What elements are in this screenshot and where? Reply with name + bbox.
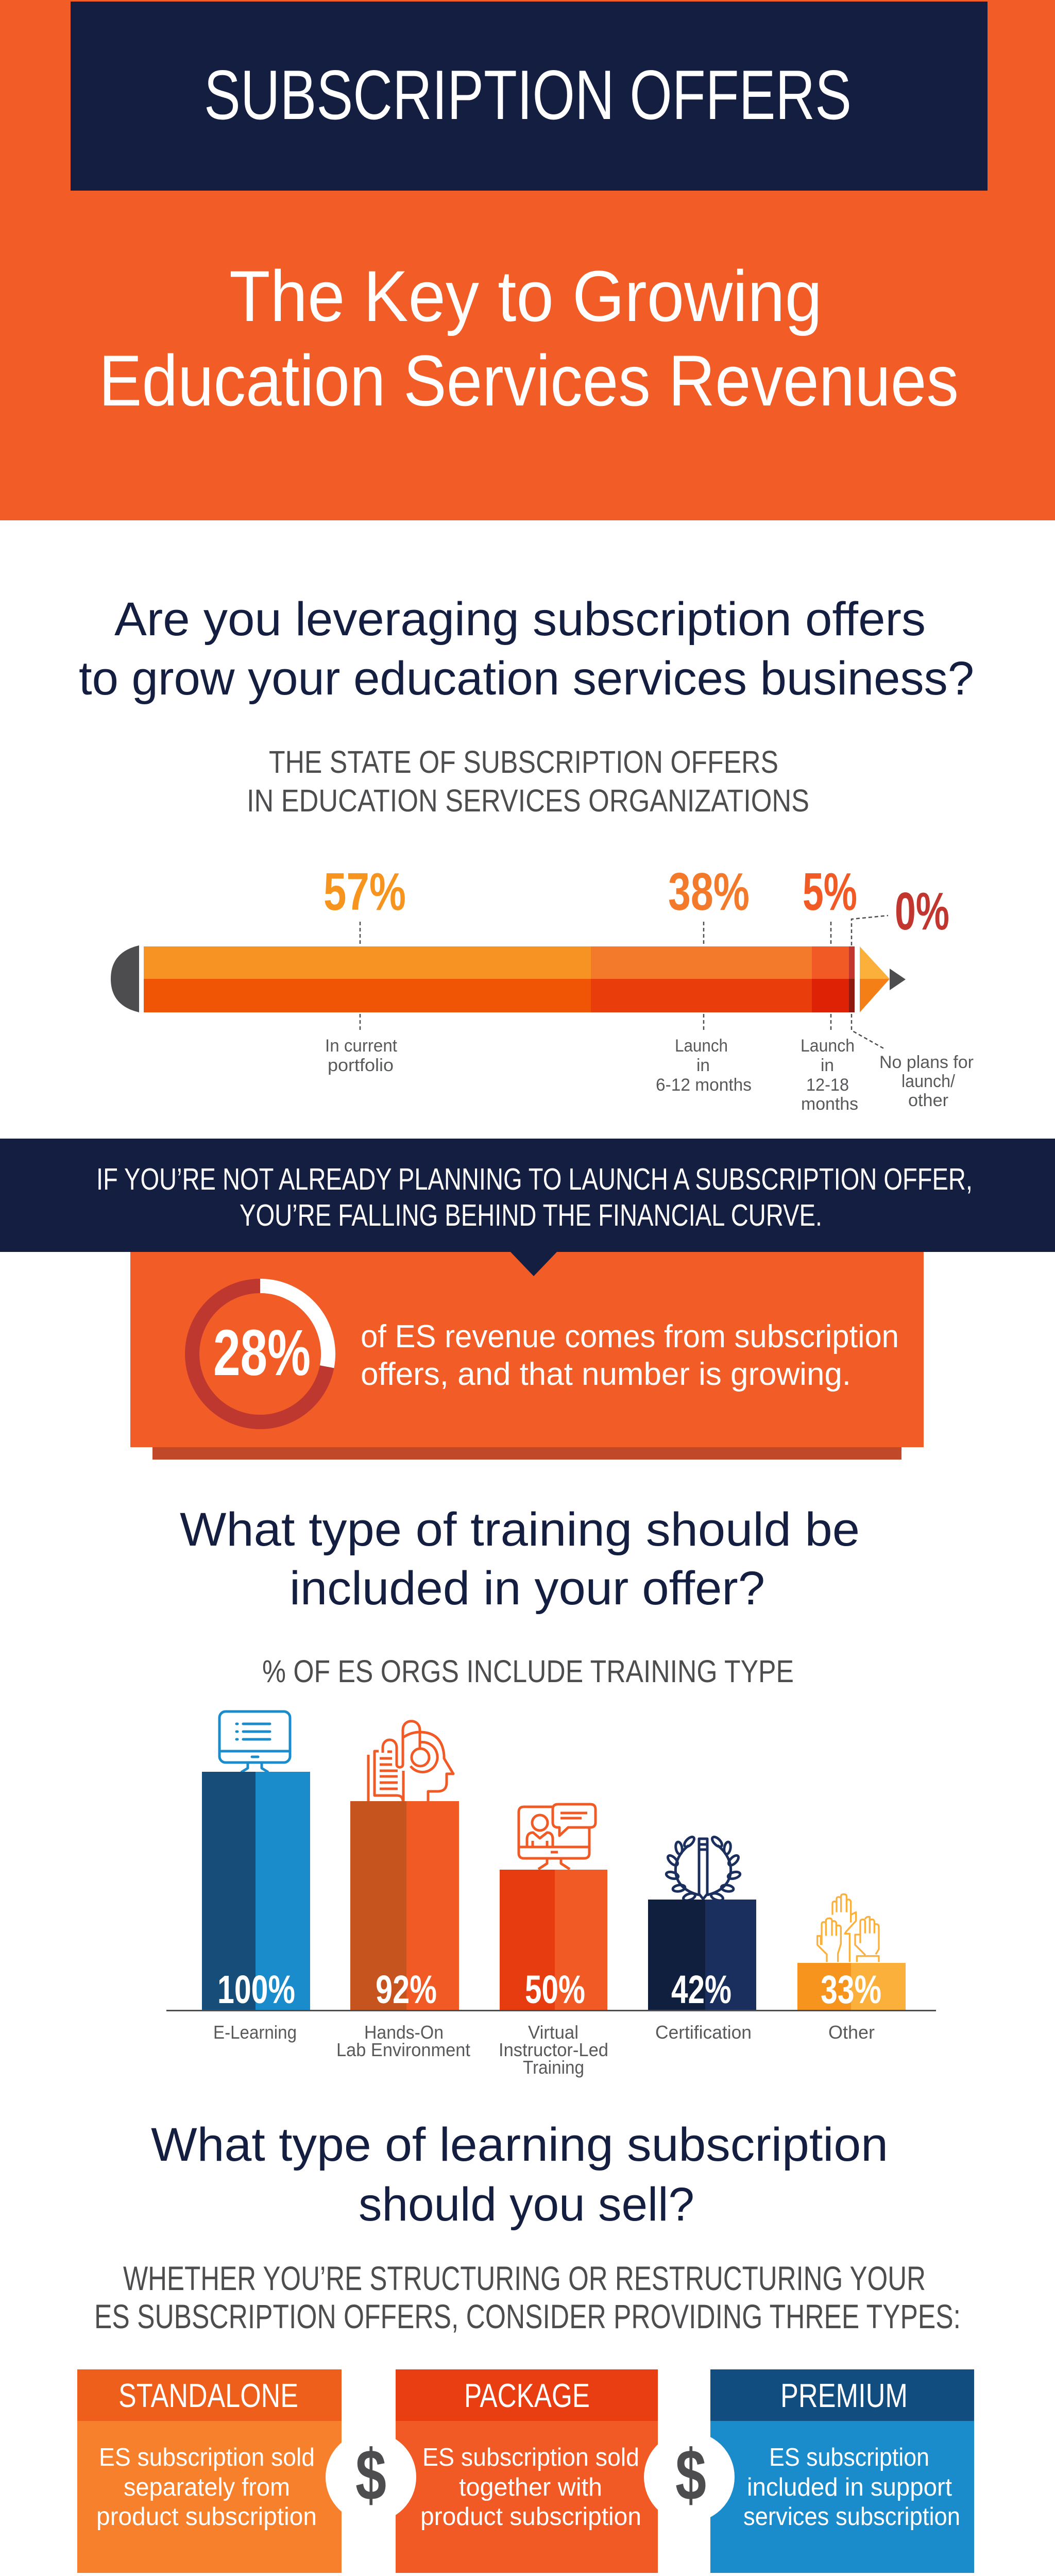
card: package [396,2369,658,2573]
callout card [130,1252,924,1447]
label: launch in 12-18 months: 12-18 [806,1075,849,1095]
icon: dollar between standalone and package [326,2432,416,2522]
bar: e-learning 100% [202,1772,310,2012]
label: in current portfolio [325,1036,398,1075]
label: launch in 12-18 months [801,1036,858,1114]
bar: other 33%: 33% [821,1968,881,2012]
card: standalone: ES subscription sold [99,2444,315,2471]
bar: hands-on lab 92%: 92% [376,1968,437,2012]
segment: 57% in current portfolio [144,946,591,1012]
label: hands-on lab environment: Hands-On [364,2022,444,2043]
value: 57%: 57% [324,862,406,921]
heading: type of learning subscription [151,2119,888,2231]
label: no plans for launch/other: other [908,1091,948,1110]
subheading: percent of ES orgs: % OF ES ORGS INCLUDE TRAINING TYPE [262,1654,794,1689]
card: premium [710,2369,974,2573]
subtitle: The Key to Growing [229,256,822,336]
subheading: state of subscription offers [247,744,809,818]
bar: other 33% [797,1963,906,2012]
card: standalone: STANDALONE [118,2377,298,2414]
label: launch in 12-18 months: months [801,1094,858,1114]
segment: 0% no plans [849,946,855,1012]
label: launch in 12-18 months: in [821,1056,834,1075]
banner: falling behind [0,1139,1055,1276]
label: virtual instructor-led training: Virtual [528,2022,578,2043]
bar: certification 42%: 42% [671,1968,731,2012]
panel: header [0,0,1055,520]
icon: dollar between package and premium [644,2432,735,2522]
label: no plans for launch/other [879,1053,974,1110]
segment: 5% launch in 12-18 months [812,946,849,1012]
callout text: offers, and that number is growing. [361,1357,851,1392]
bar: hands-on lab 92% [350,1801,459,2012]
card: premium: PREMIUM [780,2377,908,2414]
label: launch in 6-12 months: Launch [675,1036,728,1056]
heading: type of training: included in your offer? [290,1562,765,1615]
icon: dollar between package and premium: $ [675,2434,706,2515]
label: e-learning: E-Learning [213,2022,297,2043]
label: launch in 12-18 months: Launch [801,1036,855,1056]
label: virtual instructor-led training: Training [523,2057,584,2078]
icon: e-learning monitor [219,1711,290,1772]
label: in current portfolio: In current [325,1036,398,1056]
chart: 28% donut: 28% [213,1316,311,1389]
banner: falling behind: YOU’RE FALLING BEHIND THE FINANCIAL CURVE. [240,1198,822,1232]
subtitle: Education Services Revenues [99,340,959,421]
subheading: state of subscription offers: IN EDUCATION SERVICES ORGANIZATIONS [247,783,809,818]
value: 5%: 5% [803,862,857,921]
heading: type of training: What type of training should be [180,1503,860,1556]
icon: raised hands [818,1894,879,1962]
card: standalone: separately from [124,2473,290,2501]
title banner: SUBSCRIPTION OFFERS [204,56,852,134]
label: in current portfolio: portfolio [328,1056,394,1075]
label: launch in 6-12 months: 6-12 months [656,1075,752,1095]
subheading: state of subscription offers: THE STATE OF SUBSCRIPTION OFFERS [269,744,778,779]
value: 0%: 0% [895,882,949,941]
subheading: three types [94,2259,961,2335]
bar: virtual instructor-led 50%: 50% [525,1968,585,2012]
icon: pencil eraser [111,945,139,1012]
heading: leveraging subscription offers [79,593,974,705]
label: launch in 6-12 months [656,1036,752,1095]
card: premium: ES subscription [769,2444,929,2471]
chart: 28% donut [192,1286,328,1422]
heading: type of learning subscription: should you sell? [359,2178,694,2231]
bar: e-learning 100%: 100% [217,1968,295,2012]
label: certification: Certification [655,2022,752,2043]
card: package: together with [459,2473,602,2501]
card: package: ES subscription sold [422,2444,639,2471]
card: package: product subscription [420,2503,641,2531]
label: virtual instructor-led training: Instructor-Led [499,2039,608,2060]
heading: type of learning subscription: What type of learning subscription [151,2119,888,2171]
chart: training type bars [166,1711,936,2078]
label: hands-on lab environment: Lab Environment [336,2039,470,2060]
card: premium: included in support [747,2473,952,2501]
card: package: PACKAGE [464,2377,590,2414]
icon: pencil tip [860,946,906,1012]
heading: leveraging subscription offers: Are you leveraging subscription offers [114,593,926,646]
panel: revenue callout [0,1139,1055,1460]
bar: certification 42% [648,1900,756,2012]
icon: certification laurel and pencil [666,1835,741,1902]
card: standalone [77,2369,342,2573]
card: standalone: product subscription [96,2503,317,2531]
chart: pencil progress bar [111,862,974,1114]
segment: 38% launch in 6-12 months [591,946,812,1012]
subtitle [99,256,959,421]
icon: dollar between standalone and package: $ [355,2434,386,2515]
heading: leveraging subscription offers: to grow your education services business? [79,652,974,705]
icon: hands-on lab head and book [368,1721,453,1801]
callout card shadow [152,1447,901,1460]
card: premium: services subscription [743,2503,960,2531]
label: virtual instructor-led training [499,2022,608,2078]
label: other: Other [828,2022,875,2043]
callout text: of ES revenue comes from subscription [361,1319,899,1354]
title banner [71,2,988,191]
value: 38%: 38% [668,862,750,921]
icon: virtual instructor monitor [519,1804,595,1869]
bar: virtual instructor-led 50% [500,1870,607,2012]
label: hands-on lab environment [336,2022,470,2060]
panel: subscription types [77,2369,974,2573]
label: launch in 6-12 months: in [696,1056,710,1075]
label: no plans for launch/other: No plans for [879,1053,974,1072]
callout text [361,1319,899,1392]
label: no plans for launch/other: launch/ [901,1072,956,1091]
heading: type of training [180,1503,860,1615]
